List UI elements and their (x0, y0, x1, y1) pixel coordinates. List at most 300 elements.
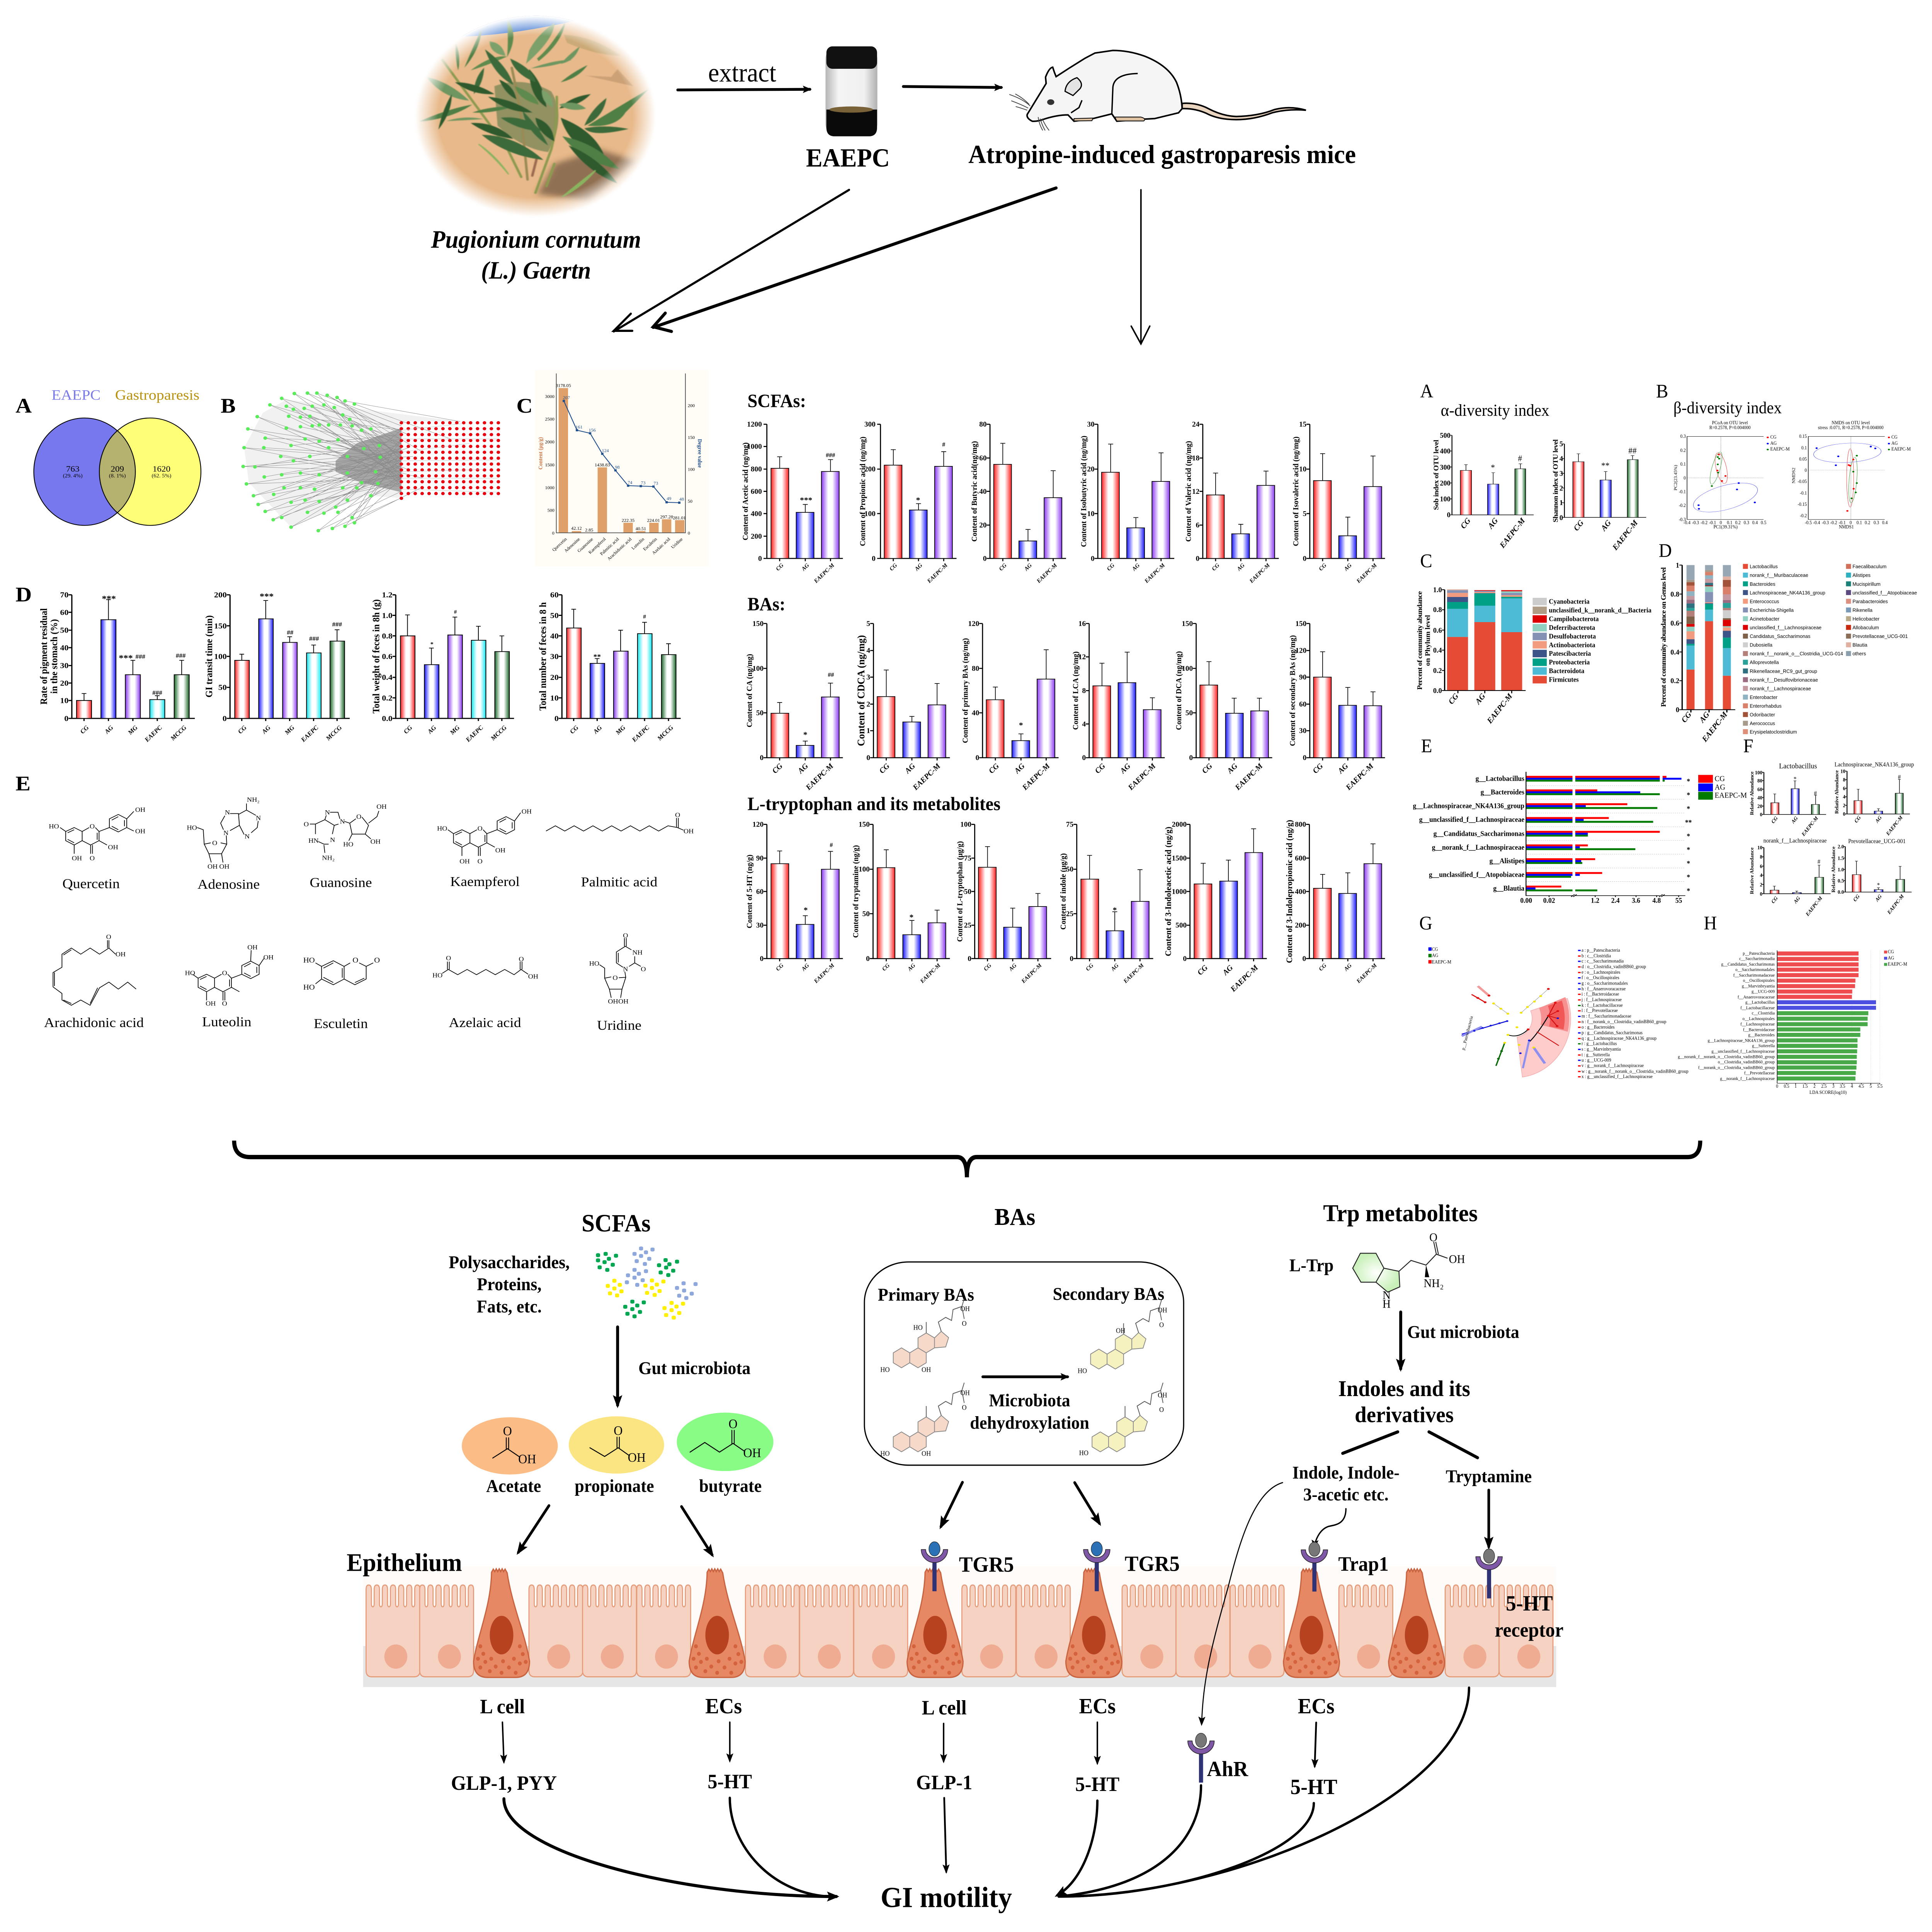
panel: differential genera bars: g__norank_f__Lachnospiraceae (1432, 843, 1524, 851)
bar chart: Lachnospiraceae NK4A136: 8 (1843, 777, 1845, 782)
chart: cladogram wheel: p__Patescibacteria (1461, 1015, 1474, 1051)
panel: LDA score chart H: f__norank_o__Clostridia_vadinBB60_group (1698, 1065, 1775, 1070)
bar chart: butyric acid: 60 (979, 454, 987, 462)
content and degree chart: 50 (688, 499, 692, 504)
legend: cladogram taxa: p : g__Candidatus_Saccharimonas (1582, 1030, 1643, 1035)
bar chart: L-tryptophan: 50 (964, 888, 971, 896)
panel: bile acid conversion: Primary BAs (878, 1284, 974, 1304)
bar chart: isovaleric acid: 5 (1303, 510, 1306, 518)
bar chart: GI transit time: EAEPC (299, 724, 320, 743)
panel: phylum stacked bars: CG (1447, 692, 1460, 706)
legend: genus: Parabacteroides (1852, 599, 1888, 604)
panel: differential genera bars (1413, 735, 1747, 905)
legend: cladogram taxa: d : o__Clostridia_vadinBB60_group (1582, 964, 1646, 969)
content and degree chart: 2500 (545, 417, 554, 422)
scatter: PCoA: PCoA on OTU level (1712, 420, 1748, 425)
legend: genus: unclassified_f__Atopobiaceae (1852, 590, 1917, 595)
panel: LDA score chart H: 1 (1794, 1084, 1797, 1089)
panel: differential genera bars: 3.6 (1632, 896, 1640, 905)
molecule: esculetin: O (352, 956, 358, 964)
bar chart: LCA: 16 (1078, 620, 1086, 628)
arrow: indole to Trap1 (1315, 1509, 1346, 1548)
panel: LDA score chart H: g__UCG-009 (1752, 989, 1775, 994)
bar chart: number of feces: 10 (550, 694, 559, 702)
panel: LDA score chart H: 4.5 (1859, 1084, 1864, 1089)
molecule: azelaic acid: HO (432, 971, 442, 979)
content and degree chart: 150 (688, 435, 695, 440)
panel: LDA score chart H: o__Clostridia_vadinBB60_group (1718, 1060, 1775, 1065)
bar chart: Shannon index (1552, 439, 1646, 552)
bar chart: isobutyric acid: EAEPC-M (1143, 562, 1167, 585)
bar chart: Sob index: # (1518, 453, 1522, 463)
scatter: PCoA: 0.3 (1680, 434, 1686, 439)
molecule: luteolin: OH (264, 954, 274, 961)
bar chart: 3-indolepropionic acid: 400 (1295, 888, 1306, 896)
bar chart: weight of feces: 0.6 (382, 652, 393, 661)
bar chart: CDCA: EAEPC-M (911, 762, 942, 792)
bar chart: DCA: CG (1200, 762, 1214, 775)
bar chart: GI transit time: 200 (214, 590, 227, 599)
content and degree chart: 297.28 (660, 515, 673, 520)
legend: cladogram groups (1429, 947, 1451, 965)
panel: differential genera bars: 4.8 (1652, 896, 1661, 905)
molecule: guanosine: Guanosine (310, 875, 372, 890)
scatter: NMDS: NMDS2 (1791, 468, 1796, 483)
legend: cladogram taxa: r : g__Lactobacillus (1582, 1041, 1617, 1046)
bar chart: indole: 25 (1066, 910, 1073, 918)
bar chart: CDCA: 2 (866, 701, 870, 708)
bar chart: CDCA: Content of CDCA (ng/mg) (855, 635, 867, 746)
bar chart: weight of feces: 0.4 (382, 673, 393, 682)
panel: abundance bar charts F: F (1743, 735, 1753, 757)
molecule: esculetin: Esculetin (314, 1016, 368, 1031)
label: microbiota dehydroxylation: dehydroxylation (970, 1413, 1089, 1433)
bar chart: 5-HT: # (830, 842, 833, 849)
content and degree chart: 0 (552, 531, 554, 536)
bar chart: Lachnospiraceae NK4A136 (1834, 762, 1914, 837)
molecule: luteolin: O (222, 1000, 227, 1007)
scatter: PCoA: CG (1770, 435, 1777, 440)
panel: LDA score chart H: g__norank_f__norank_o__Clostridia_vadinBB60_group (1678, 1054, 1775, 1059)
bar chart: Sob index: 500 (1440, 432, 1451, 440)
scatter: NMDS: -0.15 (1798, 502, 1807, 507)
scatter: NMDS: stress :0.071, R=0.2578, P=0.004000 (1818, 425, 1884, 430)
content and degree chart: 2000 (545, 440, 554, 444)
bar chart: CA: ## (828, 672, 834, 678)
bar chart: indole: AG (1110, 963, 1120, 973)
molecule: uridine: OH (608, 998, 618, 1005)
content and degree chart: Uridine (670, 537, 684, 549)
scatter: PCoA: 0.2 (1735, 520, 1741, 525)
scatter: PCoA: EAEPC-M (1770, 447, 1790, 452)
bar chart: pigment residual: 20 (60, 679, 68, 687)
content and degree chart: 124 (602, 448, 609, 453)
panel: abundance bar charts F (1743, 735, 1914, 917)
bar chart: 5-HT: * (804, 905, 808, 914)
content and degree chart: 1000 (545, 485, 554, 490)
image: Pugionium cornutum plant (414, 11, 657, 218)
bar chart: LCA (1071, 620, 1165, 792)
bar chart: Prevotellaceae: 0.0 (1838, 889, 1844, 895)
bar chart: tryptamine: Content of tryptamine (ng/g) (852, 845, 860, 938)
content and degree chart: Luteolin (631, 537, 645, 551)
bar chart: acetic acid: EAEPC-M (813, 562, 836, 585)
panel: LDA score chart H: g__Marvinbryantia (1742, 984, 1775, 989)
bar chart: tryptamine: AG (906, 963, 917, 973)
bar chart: secondary BAs: 90 (1299, 673, 1306, 681)
panel: LDA score chart H: p__Patescibacteria (1743, 951, 1775, 956)
scatter: NMDS: NMDS1 (1839, 524, 1854, 530)
bar chart: Shannon index: ** (1601, 461, 1609, 470)
bar chart: isovaleric acid (1291, 420, 1385, 585)
icon: EAEPC extract tube (825, 46, 878, 136)
panel: LDA score chart H: g__Lactobacillus (1745, 1000, 1775, 1005)
bar chart: isovaleric acid: AG (1343, 562, 1353, 572)
bar chart: LCA: 8 (1082, 687, 1086, 695)
bar chart: indole: Content of indole (μg/g) (1059, 853, 1068, 930)
panel: differential genera bars: * (1687, 777, 1690, 785)
molecule: luteolin: Luteolin (202, 1014, 252, 1029)
bar chart: CDCA (855, 620, 950, 792)
legend: cladogram taxa: g : o__Saccharimonadales (1582, 981, 1628, 986)
network diagram (243, 393, 500, 531)
panel: LDA score chart H: 5 (1870, 1084, 1872, 1089)
bar chart: GI transit time: *** (260, 592, 274, 601)
legend: genus: norank_f__Muribaculaceae (1750, 572, 1808, 578)
bar chart: norank Lachnospiraceae: # (1818, 859, 1820, 865)
molecule: kaempferol: Kaempferol (450, 874, 520, 889)
text: substrates: Polysaccharides, (449, 1252, 570, 1272)
molecule: uridine: O (612, 974, 618, 981)
scatter: PCoA: 0 (1720, 520, 1722, 525)
scatter: NMDS: EAEPC-M (1891, 447, 1911, 452)
label: indole compounds: Indole, Indole- (1292, 1462, 1400, 1483)
bar chart: CA: 150 (752, 620, 764, 628)
bar chart: acetic acid: 1200 (747, 420, 762, 429)
receptor: AhR: AhR (1207, 1757, 1249, 1781)
legend: genus: Faecalibaculum (1852, 563, 1886, 570)
molecule: guanosine: N (330, 836, 335, 844)
bar chart: Shannon index: 1 (1560, 499, 1563, 507)
bar chart: Lactobacillus: # (1814, 790, 1817, 797)
bar chart: number of feces: # (643, 614, 646, 620)
bar chart: Shannon index: EAEPC-M (1611, 518, 1640, 552)
bar chart: propionic acid: # (942, 442, 945, 448)
bar chart: 5-HT: AG (800, 963, 811, 973)
bar chart: indole: CG (1085, 963, 1095, 972)
bar chart: butyric acid: CG (998, 562, 1008, 572)
bar chart: Lachnospiraceae NK4A136: 10 (1840, 768, 1845, 774)
bar chart: Sob index: EAEPC-M (1498, 516, 1527, 550)
panel letter D: D (15, 583, 32, 606)
bar chart: CA: Content of CA (ng/mg) (745, 654, 754, 727)
bar chart: Sob index: Sob index of OTU level (1432, 440, 1440, 510)
content and degree chart: Adenosine (563, 537, 581, 553)
panel: phylum stacked bars: 0.8 (1433, 606, 1442, 614)
bar chart: Shannon index: CG (1572, 519, 1585, 533)
bar chart: LCA: AG (1118, 762, 1133, 776)
panel: phylum stacked bars: AG (1473, 692, 1487, 707)
labels: SCFA species: butyrate (699, 1476, 762, 1496)
bar chart: CA: 0 (760, 754, 764, 762)
panel: LDA score chart H: g__Sutterella (1752, 1044, 1775, 1048)
molecule: guanosine: NH₂ (322, 854, 335, 861)
bar chart: propionic acid: 100 (864, 510, 876, 518)
legend: phylum: Actinobacteriota (1549, 641, 1595, 649)
molecule: primary bile acid 2: OH (961, 1389, 970, 1397)
bar chart: isobutyric acid: Content of Isobutyric acid (ng/mg) (1080, 435, 1088, 547)
bar chart: weight of feces: Total weight of feces in 8h (g) (371, 599, 382, 714)
content and degree chart (535, 370, 709, 566)
bar chart: Lactobacillus: 100 (1755, 770, 1762, 776)
bar chart: isobutyric acid: 0 (1091, 555, 1095, 563)
bar chart: Lachnospiraceae NK4A136: 6 (1843, 786, 1845, 791)
bar chart: number of feces: Total number of feces in 8 h (537, 602, 548, 711)
bar chart: CDCA: 0 (866, 754, 870, 762)
legend: phylum: Patescibacteria (1549, 650, 1591, 657)
bar chart: CA: * (803, 730, 807, 739)
panel: LDA score chart H: f__Saccharimonadaceae (1733, 973, 1775, 978)
content and degree chart: 161 (576, 425, 583, 430)
bar chart: CA: 100 (752, 665, 764, 673)
bar chart: 3-indolepropionic acid: 600 (1295, 854, 1306, 862)
scatter: NMDS: AG (1891, 441, 1898, 446)
panel letter A: A (15, 395, 32, 418)
molecule: azelaic acid: O (446, 954, 451, 962)
bar chart: isovaleric acid: Content of Isovaleric acid (ng/mg) (1291, 437, 1300, 546)
panel: genus stacked bars: 0 (1676, 706, 1679, 714)
legend: cladogram groups: EAEPC-M (1432, 959, 1451, 965)
icon: nutrient particles (598, 1247, 696, 1319)
label: GI motility: GI motility (881, 1881, 1012, 1913)
molecule: tryptophan: NH₂ (1423, 1277, 1444, 1290)
legend: phylum: Firmicutes (1549, 676, 1579, 684)
bar chart: Prevotellaceae: 2.0 (1838, 844, 1844, 850)
molecule: azelaic acid: Azelaic acid (449, 1015, 521, 1030)
legend: genus (1743, 563, 1917, 735)
panel: differential genera bars: 55 (1675, 896, 1682, 905)
bar chart: isobutyric acid (1080, 420, 1174, 585)
molecule: kaempferol: O (478, 857, 483, 865)
chart: cladogram wheel (1461, 986, 1571, 1077)
label: indoles and derivatives (1338, 1377, 1470, 1427)
bar chart: valeric acid: 24 (1192, 420, 1200, 429)
left results panels A-E (15, 370, 709, 1033)
bar chart: Prevotellaceae (1831, 838, 1912, 916)
panel: phylum stacked bars (1416, 550, 1651, 726)
legend: cladogram taxa: j : f__Lachnospiraceae (1581, 997, 1622, 1002)
bar chart: acetic acid: ### (826, 452, 835, 459)
molecule: adenosine (187, 796, 261, 892)
bar chart: isovaleric acid: 0 (1303, 555, 1306, 563)
molecule: tryptophan: O (1429, 1231, 1437, 1244)
molecule: luteolin: HO (185, 969, 195, 976)
bar chart: Shannon index: 4 (1560, 454, 1563, 463)
panel: differential genera bars: g__Lactobacillus (1476, 774, 1524, 782)
bar chart: pigment residual: CG (78, 724, 90, 735)
scatter: NMDS: 0 (1804, 468, 1807, 473)
legend: genus: norank_f__Lachnospiraceae (1750, 685, 1811, 691)
bar chart: Lachnospiraceae NK4A136: Lachnospiraceae_NK4A136_group (1835, 762, 1914, 768)
scatter: NMDS: -0.5 (1805, 520, 1812, 525)
panel: phylum stacked bars: 0.2 (1433, 667, 1442, 675)
bar chart: secondary BAs: CG (1311, 762, 1325, 775)
bar chart: 3-indolepropionic acid: 200 (1295, 922, 1306, 930)
label: indoles and derivatives: derivatives (1355, 1403, 1454, 1427)
panel: LDA score chart H (1678, 912, 1907, 1095)
receptor: AhR (1188, 1733, 1249, 1782)
headings: middle metabolite panels: BAs: (747, 594, 786, 615)
content and degree chart: 73 (653, 481, 658, 486)
molecule: luteolin (185, 944, 274, 1029)
panel: genus stacked bars: AG (1697, 710, 1711, 725)
bar chart: number of feces (537, 590, 681, 743)
text: substrates: Proteins, (477, 1274, 542, 1294)
legend: phylum: Cyanobacteria (1549, 598, 1590, 605)
molecule: primary bile acid 1: OH (961, 1305, 970, 1313)
enterocytes (366, 1585, 1553, 1677)
bar chart: secondary BAs (1288, 620, 1385, 792)
panel: LDA score chart H: 5.5 (1877, 1084, 1883, 1089)
content and degree chart: Kaempferol (587, 537, 607, 555)
panel: differential genera bars: 0.02 (1543, 896, 1555, 905)
panel: LDA score chart H: LDA SCORE(log10) (1810, 1090, 1847, 1095)
panel: differential genera bars: * (1687, 804, 1690, 813)
legend: phylum: Deferribacterota (1549, 624, 1595, 631)
panel: differential genera bars: AG (1714, 783, 1725, 791)
bar chart: primary BAs: CG (987, 762, 1001, 775)
icon: propionate (569, 1416, 664, 1474)
bar chart: pigment residual: in the stomach (%) (49, 619, 60, 694)
panel: genus stacked bars (1659, 540, 1917, 744)
bar chart: pigment residual: EAEPC (143, 724, 164, 743)
legend: cladogram taxa: s : g__Marvinbryantia (1582, 1047, 1621, 1052)
bar chart: L-tryptophan: 75 (964, 854, 971, 862)
molecule: tryptophan: N (1383, 1289, 1391, 1302)
panel: genus stacked bars: 0.6 (1670, 619, 1679, 628)
panel: LDA score chart H: g__unclassified_f__Lachnospiraceae (1711, 1049, 1775, 1054)
icon: acetate (462, 1417, 558, 1475)
scatter: NMDS: 0.15 (1799, 434, 1807, 439)
bar chart: Lachnospiraceae NK4A136: CG (1853, 815, 1862, 824)
molecule: quercetin: O (90, 823, 95, 830)
title: species name: (L.) Gaertn (481, 256, 591, 284)
molecule: guanosine: OH (371, 838, 381, 845)
panel letter C: C (516, 395, 533, 418)
scatter: PCoA: -0.2 (1701, 520, 1708, 525)
label: L-Trp: L-Trp (1289, 1255, 1333, 1275)
signalling column: EC SCFA (705, 1694, 752, 1793)
panel: genus stacked bars: 0.2 (1670, 677, 1679, 685)
bar chart: butyric acid: AG (1023, 562, 1033, 572)
bar chart: propionic acid: Content of Propionic acid (ng/mg) (859, 437, 867, 546)
signalling column: EC SCFA: 5-HT (707, 1770, 752, 1793)
bar chart: secondary BAs: 150 (1295, 620, 1306, 628)
bar chart: weight of feces: * (430, 641, 434, 647)
bar chart: L-tryptophan: 0 (968, 955, 971, 963)
panel: LDA score chart H: EAEPC-M (1888, 962, 1907, 967)
panel: differential genera bars: * (1687, 791, 1690, 799)
title: species name: Pugionium cornutum (430, 226, 641, 253)
scatter: NMDS: -0.05 (1798, 479, 1807, 484)
panel: genus stacked bars: 0.8 (1670, 590, 1679, 599)
bar chart: tryptamine: 0 (866, 955, 870, 963)
bar chart: DCA: AG (1225, 762, 1240, 776)
bar chart: weight of feces: 0.0 (382, 714, 393, 723)
scatter: NMDS: 0.1 (1857, 520, 1862, 525)
legend: genus: Allobaculum (1852, 624, 1879, 631)
molecule: primary bile acid 1: HO (880, 1366, 890, 1373)
bar chart: weight of feces: 1.2 (382, 590, 393, 599)
bar chart: secondary BAs: 60 (1299, 701, 1306, 708)
content and degree chart: 281.01 (673, 515, 686, 520)
bar chart: 5-HT: 120 (752, 821, 764, 829)
bar chart: CA: EAEPC-M (804, 762, 835, 792)
molecule: kaempferol: HO (437, 825, 447, 832)
panel: cladogram G: G (1419, 912, 1432, 934)
pathway: Trp metabolites (1289, 1200, 1532, 1548)
icon: butyrate: OH (743, 1446, 761, 1460)
scatter: NMDS: -0.2 (1830, 520, 1837, 525)
bar chart: number of feces: 40 (550, 631, 559, 640)
bar chart: Lactobacillus (1749, 762, 1826, 837)
molecule: uridine: O (623, 932, 628, 939)
content and degree chart: Guanosine (577, 537, 594, 553)
legend: genus: unclassified_f__Lachnospiraceae (1750, 624, 1821, 631)
panel: LDA score chart H: g__norank_f__Lachnospiraceae (1720, 1077, 1775, 1081)
molecule: kaempferol: OH (522, 808, 532, 815)
bar chart: number of feces: 20 (550, 673, 559, 682)
panel: LDA score chart H: g__Lachnospiraceae_NK4A136_group (1708, 1038, 1775, 1043)
bar chart: norank Lachnospiraceae: EAEPC-M (1804, 895, 1823, 917)
scatter: NMDS: -0.4 (1813, 520, 1820, 525)
label: 5-HT receptor (1495, 1591, 1563, 1641)
panel: LDA score chart H: g__Bacteroides (1748, 1033, 1775, 1037)
molecule: palmitic acid: O (675, 811, 680, 818)
bar chart: indole: EAEPC-M (1122, 962, 1146, 985)
bar chart: Prevotellaceae: EAEPC-M (1886, 893, 1905, 916)
panel: genus stacked bars: 0.4 (1670, 648, 1680, 656)
panel: genus stacked bars: EAEPC-M (1700, 710, 1729, 744)
bar chart: primary BAs: 0 (976, 754, 979, 762)
bar chart: weight of feces: AG (425, 724, 438, 735)
panel: differential genera bars: g__Bacteroides (1481, 788, 1524, 796)
content and degree chart: 73 (641, 481, 646, 485)
bar chart: GI transit time (204, 590, 350, 743)
panel: alpha diversity: α-diversity index (1441, 401, 1549, 420)
bar chart: 3-indolepropionic acid: EAEPC-M (1355, 962, 1379, 985)
panel: LDA score chart H: H (1704, 912, 1717, 934)
panel: differential genera bars: g__unclassified_f__Atopobiaceae (1429, 871, 1524, 879)
molecule: uridine: Uridine (597, 1018, 641, 1033)
arrow: BAs to ECs (1075, 1483, 1099, 1523)
bar chart: 3-indolepropionic acid: 800 (1295, 821, 1306, 829)
molecule: secondary bile acid 1: OH (1158, 1306, 1167, 1314)
bar chart: primary BAs: AG (1012, 762, 1027, 776)
bar chart: weight of feces: MG (448, 724, 461, 736)
receptor: TGR5 on L cell (921, 1542, 948, 1591)
arrow: to network pharmacology (EAEPC) (614, 190, 849, 332)
molecule: luteolin: OH (206, 1000, 216, 1007)
arrow: to network pharmacology (mice) (653, 188, 1056, 332)
molecule: primary bile acid 1: HO (913, 1324, 923, 1332)
panel: genus stacked bars: 1 (1676, 561, 1679, 570)
bar chart: norank Lachnospiraceae: AG (1792, 895, 1801, 905)
content and degree chart: 0 (688, 531, 690, 536)
bar chart: pigment residual: *** (119, 653, 133, 663)
molecule: primary bile acid 2 (880, 1383, 970, 1458)
bar chart: Sob index (1432, 432, 1534, 550)
